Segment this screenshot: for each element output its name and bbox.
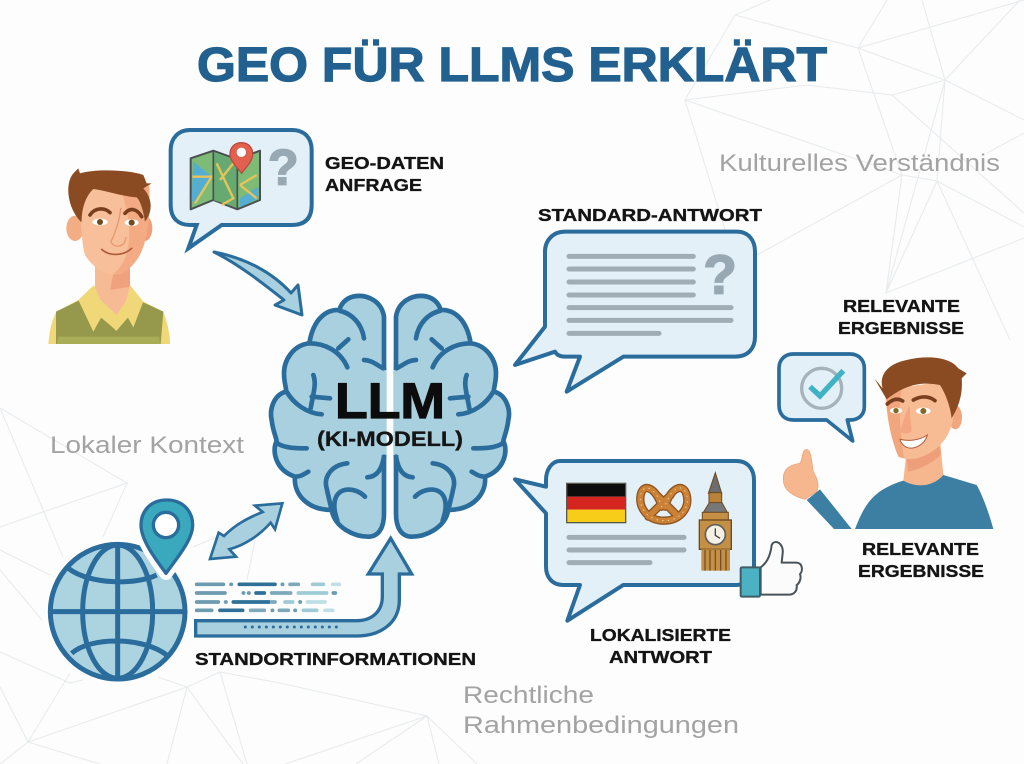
speech bubble: check mark	[779, 354, 864, 441]
right hemisphere	[393, 296, 509, 537]
label: localized answer: ANTWORT	[609, 647, 712, 667]
text placeholder lines	[569, 256, 731, 333]
person: happy user	[783, 357, 993, 529]
label: legal framework: Rahmenbedingungen	[463, 712, 739, 739]
label: localized answer: LOKALISIERTE	[590, 625, 731, 645]
icon: question mark: ?	[268, 140, 299, 196]
label: localized answer	[590, 625, 731, 667]
hand	[783, 449, 818, 499]
icon: check circle	[802, 368, 843, 408]
icon: thumbs up	[741, 542, 802, 597]
label: legal framework	[463, 682, 739, 739]
label: geo query: ANFRAGE	[325, 175, 422, 195]
speech bubble: localized answer	[515, 461, 802, 621]
label: relevant results top: RELEVANTE	[843, 296, 960, 316]
label: relevant results bottom: ERGEBNISSE	[858, 561, 984, 581]
label: geo query	[325, 153, 444, 195]
icon: German flag	[567, 483, 626, 523]
label: relevant results bottom: RELEVANTE	[862, 539, 979, 559]
person: asking user	[48, 168, 170, 344]
label: relevant results bottom	[858, 539, 984, 581]
left hemisphere	[271, 296, 387, 537]
speech bubble: standard answer	[515, 232, 755, 392]
brain: LLM	[271, 296, 509, 537]
label: KI-Modell: (KI-MODELL)	[317, 428, 463, 451]
label: legal framework: Rechtliche	[463, 682, 594, 709]
data stream	[197, 584, 339, 610]
icon: clock tower	[699, 473, 731, 571]
icon: globe	[50, 544, 185, 679]
text placeholder lines	[569, 537, 684, 563]
label: LLM: LLM	[335, 373, 445, 429]
icon: map	[191, 151, 260, 209]
icon: globe pin	[141, 500, 193, 573]
label: geo query: GEO-DATEN	[325, 153, 444, 173]
icon: location pin	[230, 143, 253, 173]
label: cultural understanding: Kulturelles Verständnis	[719, 150, 1000, 177]
arrow: two-way exchange	[210, 503, 282, 559]
label: relevant results top: ERGEBNISSE	[838, 318, 964, 338]
label: local context: Lokaler Kontext	[50, 432, 244, 459]
icon: question mark: ?	[703, 244, 737, 306]
arrows and location data	[50, 500, 412, 679]
label: standard answer: STANDARD-ANTWORT	[538, 205, 762, 225]
arrow: location to LLM	[196, 538, 412, 636]
title: GEO FÜR LLMS ERKLÄRT	[197, 39, 827, 92]
label: location information: STANDORTINFORMATIONEN	[195, 649, 476, 669]
icon: pretzel	[640, 488, 687, 521]
arrow: query to LLM	[214, 252, 302, 315]
speech bubble: geo query	[171, 130, 312, 248]
label: relevant results top	[838, 296, 964, 338]
